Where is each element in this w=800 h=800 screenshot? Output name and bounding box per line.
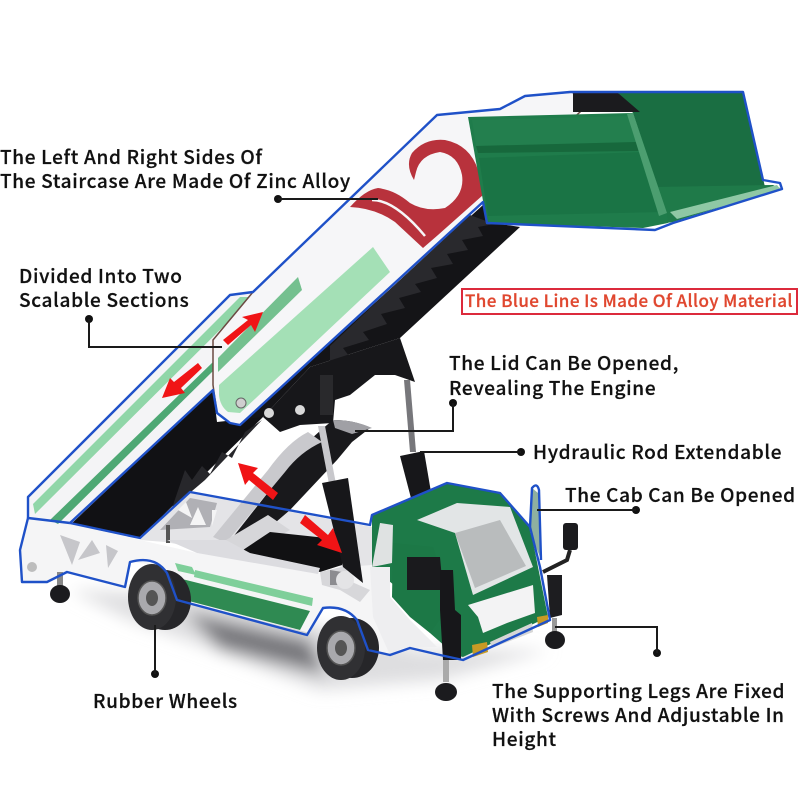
callout: staircase sides — [0, 143, 378, 203]
callout: supporting legs: The Supporting Legs Are Fixed — [492, 677, 785, 704]
right hydraulic rod — [400, 380, 432, 502]
callout: staircase sides: The Staircase Are Made Of Zinc Alloy — [0, 167, 351, 194]
top mechanism hinge — [263, 338, 415, 432]
callout: two scalable sections — [19, 262, 222, 347]
arrow: lift arm up — [238, 463, 278, 500]
arrow: upper section out — [223, 312, 263, 345]
rear wheel — [128, 564, 191, 630]
callout: rubber wheels — [93, 625, 238, 714]
arrow: lower section out — [162, 363, 202, 398]
right support leg and mirror — [530, 488, 578, 649]
front wheel — [317, 616, 379, 680]
truck bed back truss — [140, 493, 372, 570]
ground shadow — [70, 590, 550, 690]
lower staircase underside — [70, 390, 263, 538]
callout: lid engine: The Lid Can Be Opened, — [449, 349, 679, 376]
green lid box — [468, 92, 781, 228]
callout: hydraulic rod — [420, 438, 782, 465]
callout: cab opens: The Cab Can Be Opened — [565, 481, 796, 508]
callout: staircase sides: The Left And Right Sides Of — [0, 143, 263, 170]
callout: lid engine: Revealing The Engine — [449, 374, 656, 401]
callout: supporting legs: Height — [492, 725, 557, 752]
lower staircase panel — [28, 292, 253, 524]
callout: supporting legs — [492, 627, 785, 752]
scissor lift arm — [213, 420, 372, 553]
upper staircase underside — [240, 205, 520, 425]
left hydraulic rod — [318, 426, 363, 583]
front support leg — [435, 570, 461, 701]
headlights — [472, 615, 548, 657]
red swoosh logo — [350, 140, 483, 248]
callout: rubber wheels: Rubber Wheels — [93, 687, 238, 714]
truck body — [20, 518, 437, 655]
callout: supporting legs: With Screws And Adjustable In — [492, 701, 785, 728]
rear support leg — [50, 572, 70, 603]
windshield — [417, 503, 533, 595]
callout: two scalable sections: Scalable Sections — [19, 286, 189, 313]
license plate — [490, 623, 533, 648]
upper staircase panel — [213, 92, 580, 425]
blue alloy outline — [20, 92, 782, 660]
arrow: lift arm down — [300, 515, 342, 553]
screw — [236, 398, 246, 408]
cab — [370, 483, 548, 657]
callout: lid engine — [355, 349, 679, 431]
engine bay — [240, 532, 345, 572]
callout: two scalable sections: Divided Into Two — [19, 262, 183, 289]
grille — [468, 585, 535, 633]
callout: hydraulic rod: Hydraulic Rod Extendable — [533, 438, 782, 465]
callout: blue line legend: The Blue Line Is Made Of Alloy Material — [465, 287, 793, 312]
